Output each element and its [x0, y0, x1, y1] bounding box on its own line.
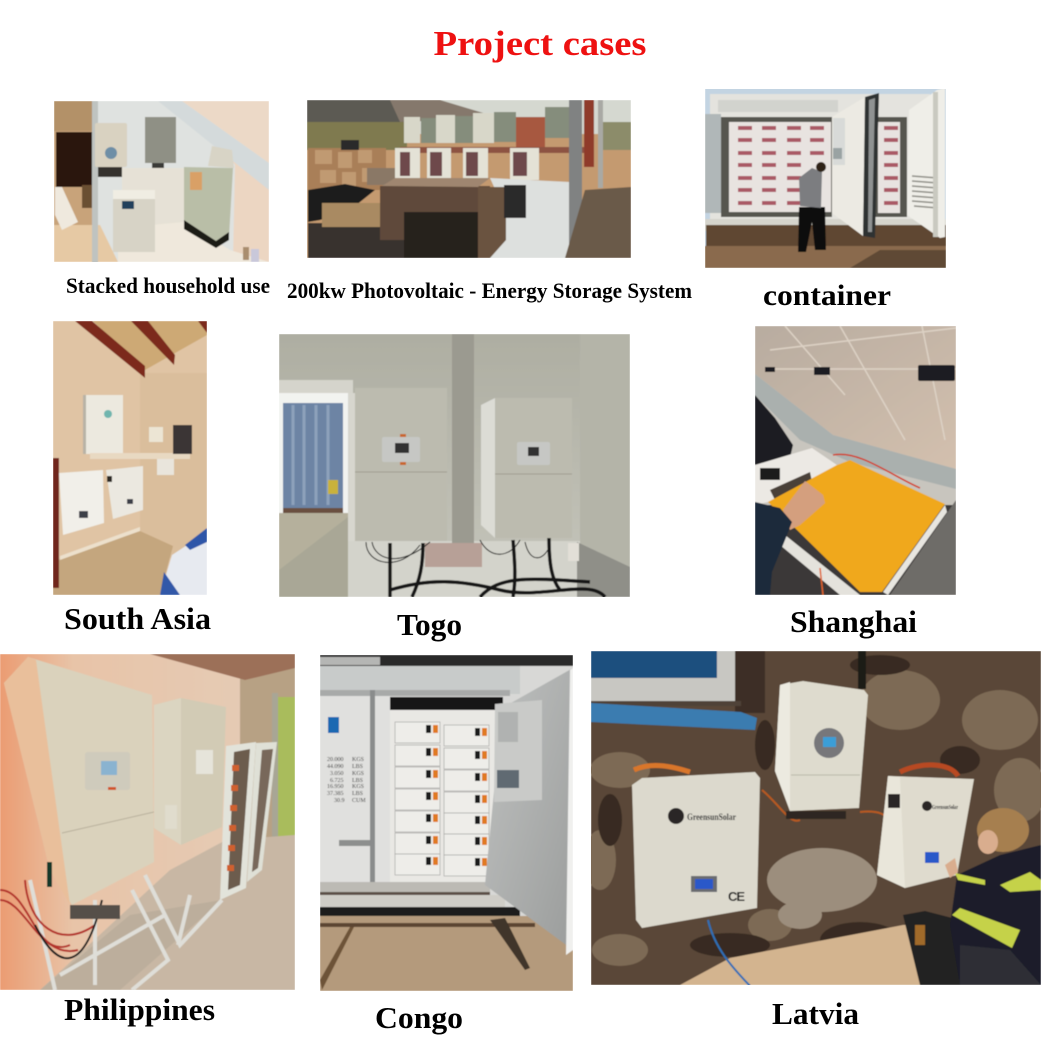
large inverter [4, 657, 154, 905]
label: Togo: Togo [397, 607, 462, 642]
label: Congo: Congo [375, 1000, 463, 1035]
battery left [59, 470, 104, 535]
label: 200kw Photovoltaic - Energy Storage System: 200kw Photovoltaic - Energy Storage System [287, 278, 692, 303]
photo: container [705, 88, 946, 268]
container data plate: LBS [352, 778, 363, 784]
inverter [95, 123, 127, 167]
label: Stacked household use: Stacked household use [66, 273, 270, 298]
container data plate: 3.050 [330, 771, 344, 777]
container data plate: 16.950 [327, 784, 344, 790]
open door [832, 97, 865, 236]
label: South Asia: South Asia [64, 601, 212, 636]
inverter [775, 681, 868, 811]
sensor boxes [765, 365, 955, 381]
battery racks [395, 148, 539, 180]
photo: Philippines [0, 654, 295, 990]
photo: Shanghai [755, 326, 956, 595]
label: Latvia: Latvia [772, 996, 859, 1031]
battery left: GreensunSolar [687, 812, 736, 822]
photo: stacked household use [54, 101, 269, 262]
shipping container [283, 403, 343, 513]
battery modules [729, 122, 900, 213]
container data plate: CUM [352, 798, 366, 804]
battery left: CE [728, 889, 745, 904]
large carton [380, 178, 506, 258]
hand [783, 481, 825, 530]
floor [680, 924, 921, 985]
photo: South Asia [53, 321, 207, 595]
inverter left [355, 389, 447, 473]
cabinet [184, 167, 233, 248]
container data plate: 6.725 [330, 778, 344, 784]
open door [485, 668, 573, 955]
label: Shanghai: Shanghai [790, 604, 917, 639]
battery racks [220, 742, 277, 900]
container data plate: 30.9 [334, 798, 344, 804]
container data plate: LBS [352, 791, 363, 797]
photo: Latvia [584, 651, 1046, 986]
technician [903, 808, 1041, 985]
label: Philippines: Philippines [64, 992, 215, 1027]
photo: Congo [320, 655, 573, 991]
battery modules [395, 722, 489, 876]
worker [798, 162, 826, 252]
title: Project cases [434, 24, 646, 63]
battery [113, 190, 155, 252]
battery right [106, 466, 143, 519]
container data plate: KGS [352, 757, 364, 763]
container data plate: KGS [352, 784, 364, 790]
container data plate: 44.090 [327, 764, 344, 770]
window [591, 651, 757, 730]
yellow plate [768, 460, 945, 592]
aluminium frames [30, 875, 222, 990]
cables [366, 538, 605, 597]
battery right [877, 776, 974, 888]
inverter [83, 395, 123, 457]
container data plate: 20.000 [327, 757, 344, 763]
battery right: GreensunSolar [932, 805, 958, 811]
photo: 200kw photovoltaic energy storage system [307, 100, 631, 258]
inverter row [404, 107, 569, 143]
sleeve [755, 502, 792, 595]
inverter right [481, 398, 572, 538]
container data plate: KGS [352, 771, 364, 777]
cardboard boxes [308, 148, 386, 190]
container data plate: LBS [352, 764, 363, 770]
battery left [632, 772, 760, 928]
label: container: container [763, 279, 891, 312]
container data plate [327, 757, 366, 804]
photo: Togo [279, 334, 630, 597]
second inverter [154, 698, 226, 845]
container data plate: 37.385 [327, 791, 344, 797]
